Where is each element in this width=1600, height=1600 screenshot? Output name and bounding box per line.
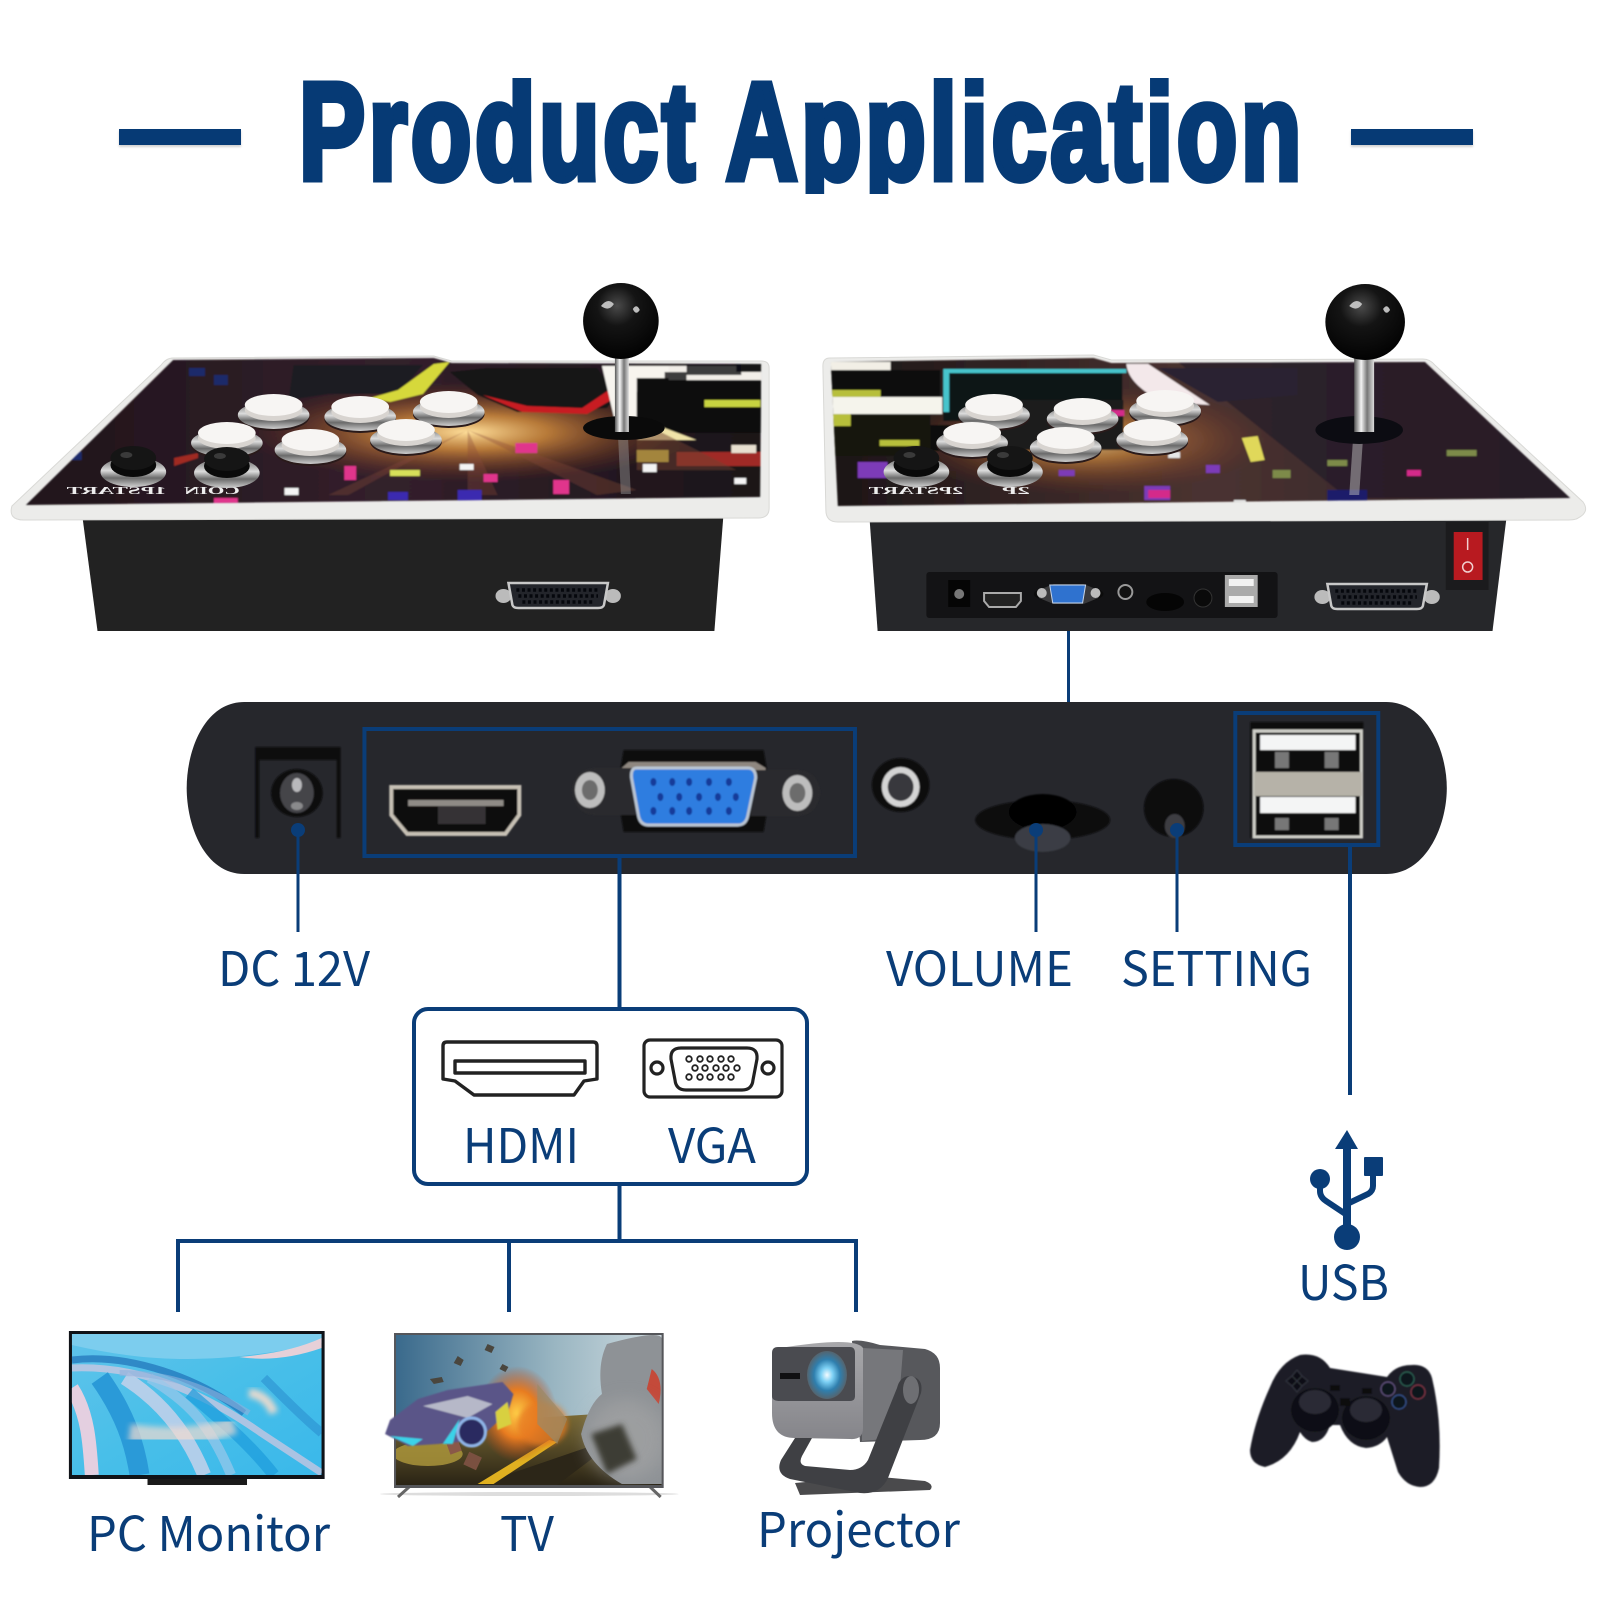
dark pixel blocks (831, 370, 940, 398)
pivot (903, 1376, 919, 1404)
DB25 port (496, 583, 621, 608)
VGA port (1034, 584, 1103, 604)
left stick (1291, 1388, 1339, 1432)
console base box (83, 516, 723, 631)
callout line: setting (1170, 823, 1184, 932)
USB highlight box (1235, 713, 1378, 845)
monitor frame (69, 1331, 325, 1479)
front panel (772, 1347, 855, 1401)
title dash right (1351, 129, 1473, 145)
left arcade console (0, 283, 776, 631)
base disc (1315, 416, 1403, 444)
USB port (1225, 575, 1258, 607)
output connector tree (178, 1184, 856, 1312)
Projector label: Projector (757, 1491, 960, 1561)
icon: VGA (644, 1040, 782, 1097)
acrylic top plate (11, 356, 769, 520)
ball top (583, 283, 659, 359)
white button row (936, 390, 1201, 464)
right arcade console (820, 284, 1586, 631)
volume wheel (975, 794, 1110, 852)
stand arm (779, 1376, 922, 1493)
button labels (mirrored) (65, 485, 240, 497)
face buttons (1381, 1372, 1425, 1409)
setting button (1144, 779, 1204, 838)
HDMI port (984, 593, 1021, 607)
panel body (187, 702, 1447, 874)
title dash left (119, 129, 241, 145)
black buttons (100, 446, 260, 488)
volume wheel (1146, 593, 1184, 611)
PC Monitor label: PC Monitor (87, 1495, 330, 1565)
HDMI port (391, 787, 519, 834)
setting button (1194, 589, 1212, 607)
box outline (414, 1009, 807, 1184)
black buttons (884, 446, 1043, 487)
port plate (926, 572, 1278, 618)
PC monitor image (69, 1331, 325, 1485)
game car popping out (385, 1382, 513, 1446)
shaft (1354, 352, 1374, 432)
dark blocks (289, 365, 423, 400)
shaft (615, 352, 629, 432)
audio jack (872, 758, 929, 812)
base disc (583, 416, 665, 440)
DC 12V label: DC 12V (218, 930, 370, 1000)
callout line: volume (1029, 823, 1043, 932)
rear housing (852, 1340, 940, 1442)
1P START label: 1PSTART (65, 485, 166, 497)
joystick (1315, 284, 1405, 444)
VGA port (572, 750, 820, 832)
USB label: USB (1298, 1244, 1389, 1314)
monitor wallpaper (72, 1334, 322, 1475)
pixels (214, 443, 569, 506)
icon: USB symbol (1310, 1130, 1383, 1250)
front housing (772, 1342, 863, 1439)
white stair (600, 364, 670, 417)
TV picture (393, 1335, 667, 1485)
white edge (1126, 364, 1210, 405)
TV image (380, 1333, 679, 1497)
HDMI label: HDMI (463, 1107, 579, 1177)
stand foot (795, 1476, 932, 1495)
VGA label: VGA (668, 1107, 756, 1177)
icon: HDMI (443, 1042, 597, 1095)
joystick (583, 283, 665, 440)
HDMI VGA output box (414, 1009, 807, 1184)
printed artwork (26, 357, 762, 506)
SETTING label: SETTING (1121, 930, 1312, 1000)
title (118, 78, 1474, 194)
DC jack (255, 747, 341, 838)
power rocker switch (1446, 522, 1489, 590)
TV floor shadow (380, 1492, 679, 1496)
connector line to video box (618, 857, 622, 1008)
TV label: TV (500, 1495, 554, 1565)
white button row (191, 391, 485, 466)
DC port (948, 580, 970, 607)
mode buttons (1330, 1385, 1372, 1406)
printed artwork (820, 350, 1586, 510)
VOLUME label: VOLUME (886, 930, 1073, 1000)
console base box (870, 518, 1506, 631)
start label: 2PSTART (867, 485, 963, 497)
IO panel close-up (187, 702, 1447, 874)
light rays (328, 430, 637, 495)
joystick reflection (618, 434, 631, 494)
red stair (483, 390, 615, 414)
2P label: 2P (1001, 485, 1030, 497)
COIN label: COIN (184, 485, 240, 497)
projector image (772, 1340, 940, 1495)
D-pad (1286, 1370, 1308, 1392)
connector line console to IO panel (1067, 631, 1070, 703)
ball top (1325, 284, 1405, 360)
grille (862, 1348, 903, 1441)
yellow streak (370, 362, 450, 402)
gamepad body (1250, 1355, 1440, 1487)
acrylic top plate (823, 355, 1586, 522)
USB ports (1250, 722, 1363, 838)
slot (780, 1373, 800, 1379)
arcade buttons (884, 390, 1201, 487)
joystick reflection (1349, 436, 1363, 495)
callout line: USB (1348, 847, 1352, 1095)
TV frame (394, 1333, 664, 1488)
pixels (858, 462, 1220, 500)
lens (807, 1351, 847, 1399)
callout line: DC 12V (291, 823, 305, 932)
HDMI VGA highlight box (364, 729, 855, 856)
TV legs (398, 1480, 661, 1497)
audio port (1118, 585, 1132, 599)
gamepad image (1250, 1355, 1440, 1487)
arcade buttons (100, 391, 485, 488)
DB25 port (1314, 584, 1440, 609)
button labels (mirrored) (867, 485, 1030, 497)
monitor stand (148, 1479, 247, 1485)
cyan frame block (943, 369, 1122, 421)
right stick (1342, 1396, 1390, 1440)
